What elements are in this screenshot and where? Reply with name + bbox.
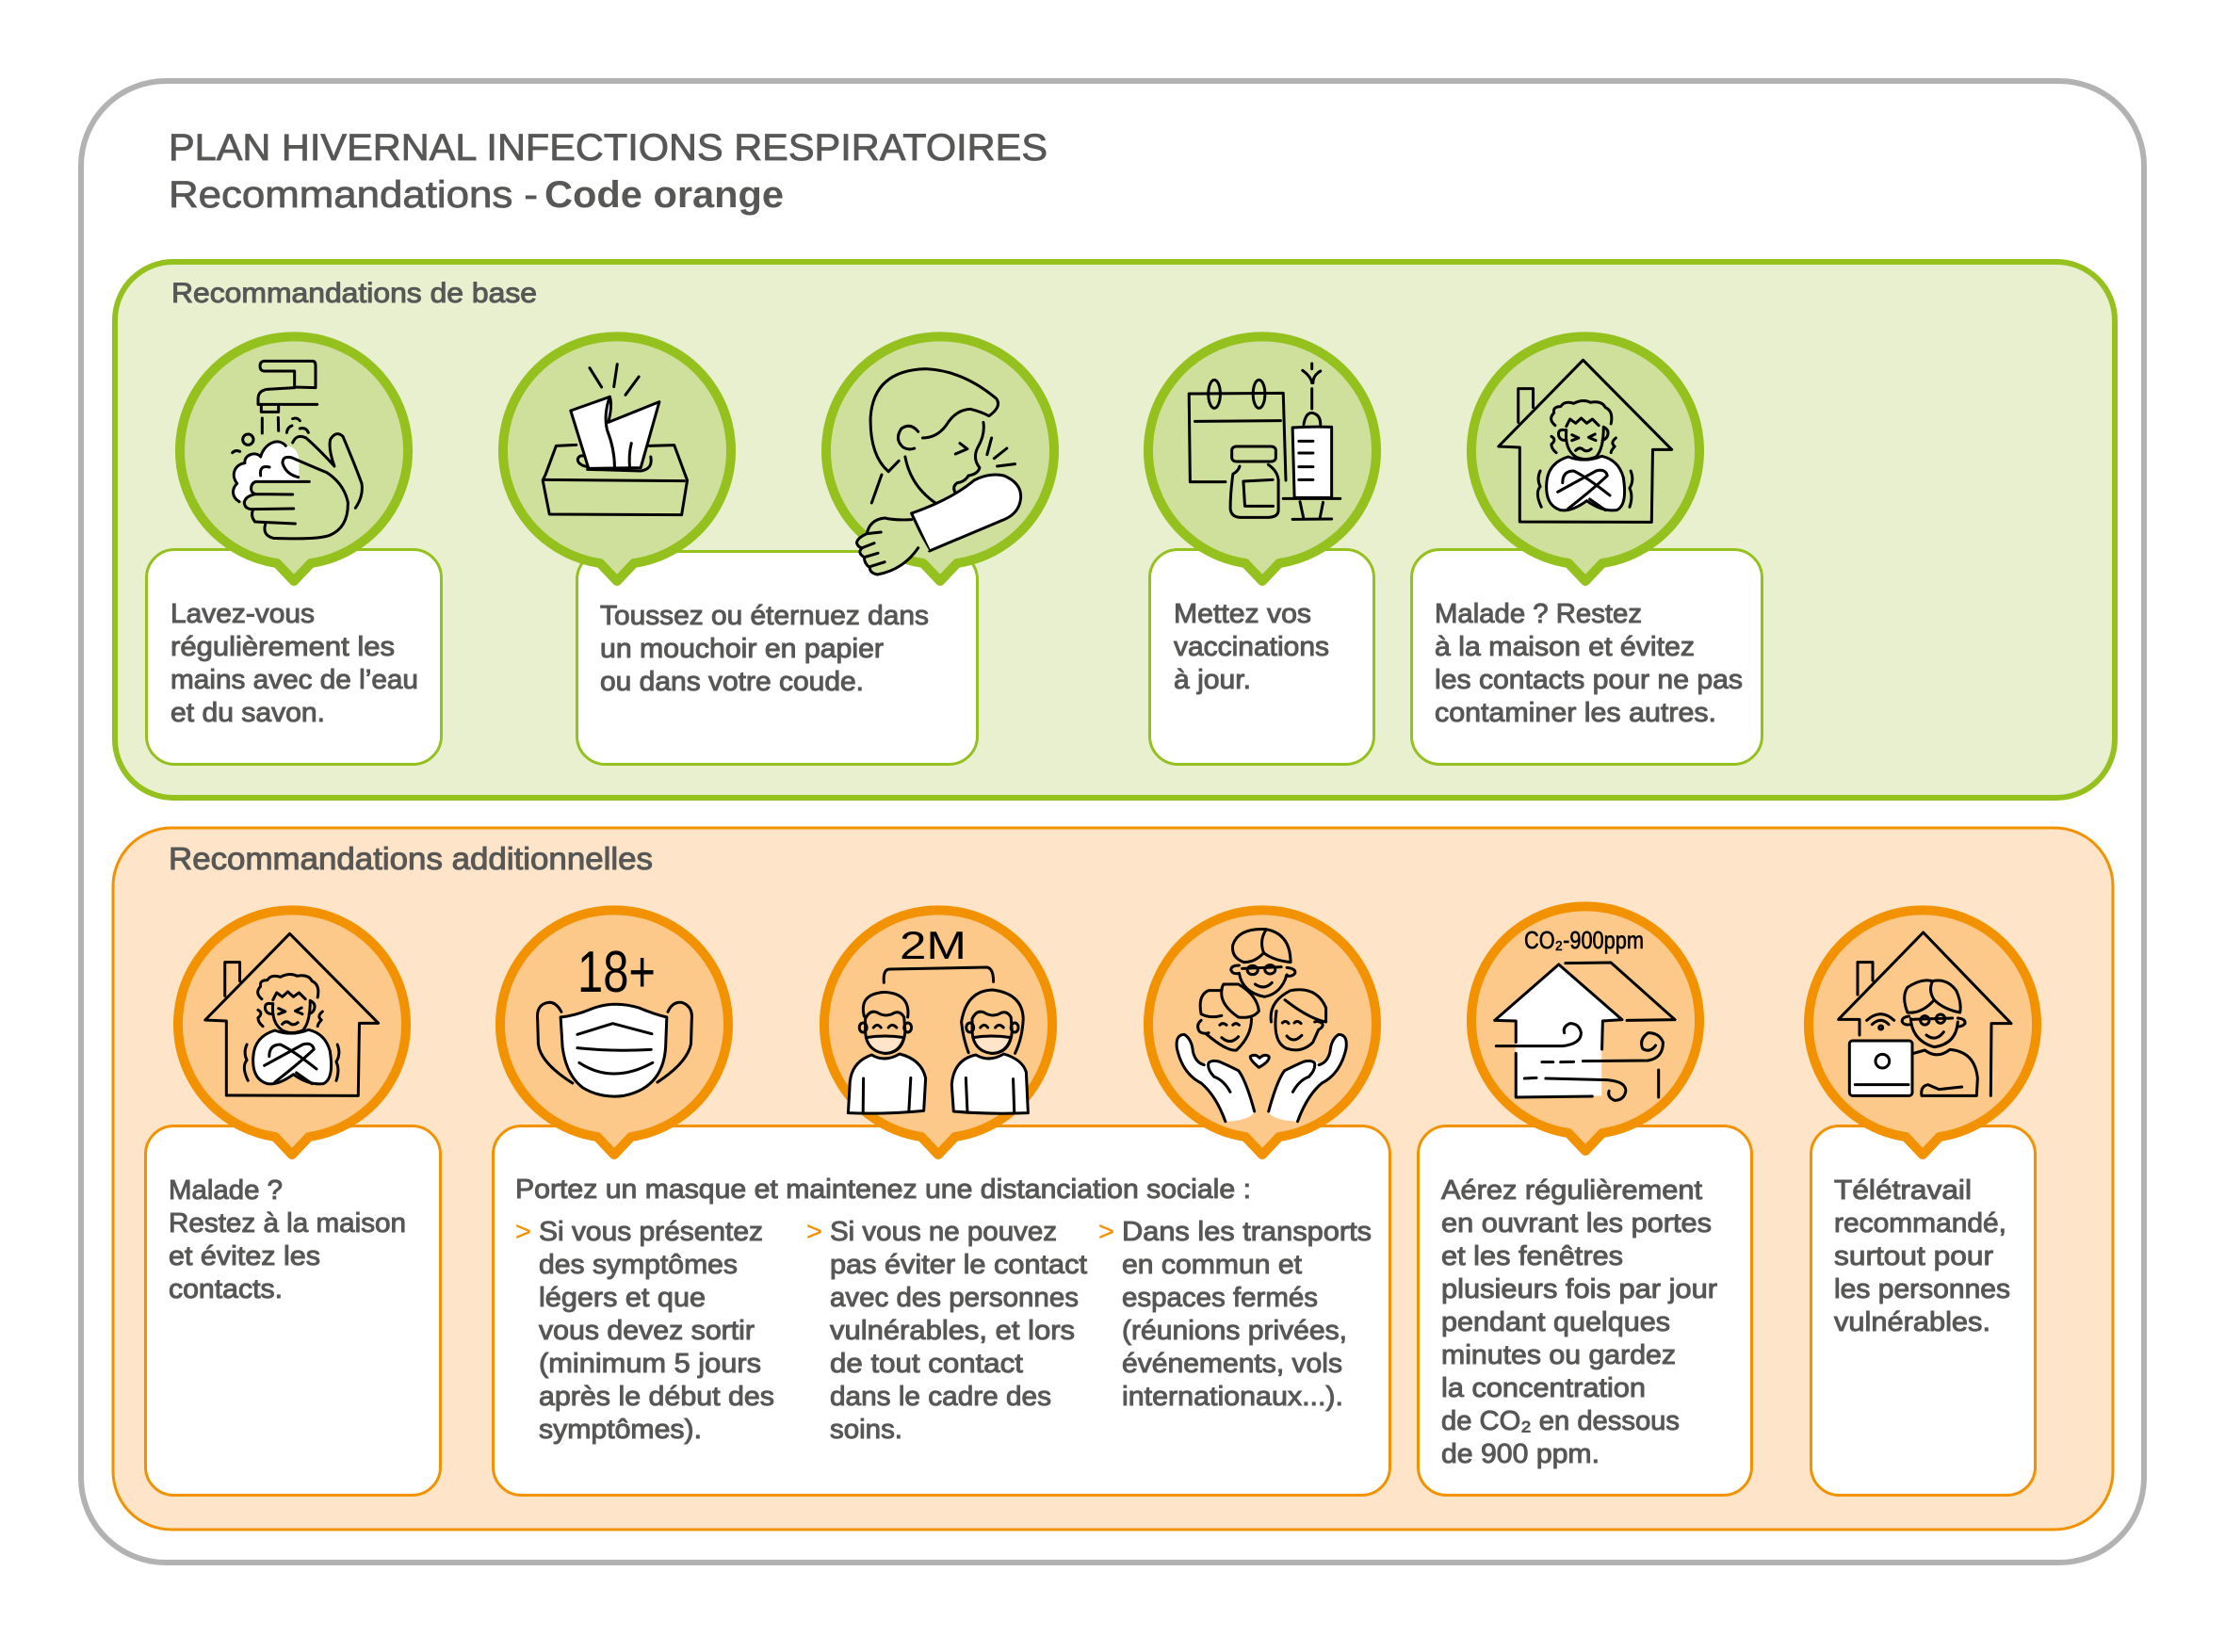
- title: [169, 127, 1048, 216]
- text: column symptômes: >: [515, 1217, 531, 1247]
- icon: family in caring hands: [1177, 930, 1346, 1122]
- text: column symptômes: Si vous présentez: [539, 1217, 763, 1247]
- text: column contacts vulnérables: avec des personnes: [830, 1283, 1079, 1313]
- text: column contacts vulnérables: pas éviter le contact: [830, 1250, 1087, 1280]
- balloon: vaccin: [1148, 336, 1376, 581]
- icon: coughing into elbow: [856, 369, 1021, 575]
- box: vaccinations: [1149, 550, 1373, 765]
- text: malade: Malade ? Restez: [1435, 599, 1642, 629]
- text: télétravail: vulnérables.: [1834, 1307, 1990, 1337]
- title: Recommandations -: [169, 174, 538, 216]
- text: column transports: en commun et: [1122, 1250, 1302, 1280]
- balloon: aération: [1471, 906, 1699, 1151]
- text: vaccinations: [1174, 599, 1329, 695]
- panel: recommandations de base: [115, 262, 2115, 798]
- balloon: lavage des mains: [180, 336, 408, 581]
- icon: sick person at home: [1499, 360, 1672, 522]
- text: column symptômes: vous devez sortir: [539, 1316, 755, 1346]
- text: column contacts vulnérables: soins.: [830, 1415, 902, 1445]
- text: malade: et évitez les: [169, 1241, 320, 1271]
- text: column contacts vulnérables: >: [806, 1217, 822, 1247]
- box: malade: [145, 1126, 441, 1496]
- balloon: mouchoir: [503, 336, 731, 581]
- text: aérez: et les fenêtres: [1441, 1241, 1623, 1271]
- box: toussez: [577, 552, 978, 765]
- icon label: CO2 900 ppm: CO₂-900ppm: [1524, 926, 1644, 954]
- text: aérez: pendant quelques: [1441, 1307, 1670, 1337]
- box: lavez-vous: [147, 550, 441, 765]
- text: malade: contacts.: [169, 1274, 283, 1304]
- text: télétravail: les personnes: [1834, 1274, 2010, 1304]
- icon: calendar, vial and syringe: [1189, 364, 1340, 519]
- heading: additionnelles: Recommandations additionnelles: [169, 841, 653, 876]
- text: malade: [169, 1175, 406, 1304]
- text: aérez: [1441, 1175, 1717, 1469]
- box: malade: [1411, 550, 1762, 765]
- text: column transports: [1098, 1217, 1372, 1412]
- text: toussez: un mouchoir en papier: [600, 634, 884, 664]
- box: masque et distanciation: [494, 1126, 1390, 1496]
- box: aérez: [1419, 1126, 1752, 1496]
- text: aérez: de 900 ppm.: [1441, 1439, 1600, 1469]
- balloon: coude: [826, 336, 1054, 581]
- icon: face mask 18+: [537, 1002, 691, 1096]
- text: lavez-vous: régulièrement les: [171, 632, 395, 662]
- text: malade: contaminer les autres.: [1435, 698, 1716, 728]
- text: aérez: la concentration: [1441, 1373, 1646, 1403]
- text: column transports: Dans les transports: [1122, 1217, 1372, 1247]
- icon: ventilated house: [1495, 963, 1675, 1100]
- text: column contacts vulnérables: [806, 1217, 1087, 1445]
- text: aérez: minutes ou gardez: [1441, 1340, 1676, 1370]
- text: column symptômes: symptômes).: [539, 1415, 702, 1445]
- title: PLAN HIVERNAL INFECTIONS RESPIRATOIRES: [169, 127, 1048, 169]
- text: column contacts vulnérables: dans le cadre des: [830, 1382, 1051, 1412]
- icon label: 2M: 2M: [900, 923, 966, 967]
- text: aérez: plusieurs fois par jour: [1441, 1274, 1717, 1304]
- text: aérez: Aérez régulièrement: [1441, 1175, 1702, 1206]
- text: aérez: de CO₂ en dessous: [1441, 1406, 1680, 1436]
- text: column contacts vulnérables: vulnérables, et lors: [830, 1316, 1075, 1346]
- text: lavez-vous: Lavez-vous: [171, 599, 315, 629]
- text: malade: Malade ?: [169, 1175, 283, 1206]
- text: lavez-vous: [171, 599, 418, 728]
- panel: recommandations additionnelles: [113, 828, 2113, 1530]
- text: toussez: ou dans votre coude.: [600, 667, 864, 697]
- text: télétravail: surtout pour: [1834, 1241, 1993, 1271]
- text: column symptômes: des symptômes: [539, 1250, 738, 1280]
- text: column transports: espaces fermés: [1122, 1283, 1318, 1313]
- text: column transports: >: [1098, 1217, 1114, 1247]
- balloon: famille: [1148, 910, 1376, 1155]
- text: vaccinations: à jour.: [1174, 665, 1251, 695]
- text: column contacts vulnérables: de tout contact: [830, 1349, 1023, 1379]
- text: télétravail: recommandé,: [1834, 1208, 2006, 1239]
- balloon: malade maison: [1471, 336, 1699, 581]
- icon: sick person at home: [205, 933, 379, 1095]
- text: malade: [1435, 599, 1743, 728]
- balloon: distance: [824, 910, 1052, 1155]
- balloon: masque: [500, 910, 728, 1155]
- text: lavez-vous: et du savon.: [171, 698, 325, 728]
- heading: base: Recommandations de base: [171, 278, 537, 309]
- box: télétravail: [1811, 1126, 2035, 1496]
- text: column transports: événements, vols: [1122, 1349, 1342, 1379]
- text: vaccinations: Mettez vos: [1174, 599, 1311, 629]
- text: lavez-vous: mains avec de l’eau: [171, 665, 418, 695]
- text: column symptômes: (minimum 5 jours: [539, 1349, 761, 1379]
- icon label: 18+: 18+: [577, 940, 656, 1005]
- text: column symptômes: légers et que: [539, 1283, 706, 1313]
- text: télétravail: Télétravail: [1834, 1175, 1972, 1206]
- text: masque intro: Portez un masque et maintenez une distanciation sociale :: [515, 1174, 1251, 1205]
- icon: tissue box: [543, 364, 688, 515]
- text: télétravail: [1834, 1175, 2010, 1337]
- text: column contacts vulnérables: Si vous ne pouvez: [830, 1217, 1057, 1247]
- balloon: malade maison: [178, 910, 406, 1155]
- text: toussez: Toussez ou éternuez dans: [600, 601, 929, 631]
- text: toussez: [600, 601, 929, 697]
- text: column transports: internationaux...).: [1122, 1382, 1343, 1412]
- text: malade: les contacts pour ne pas: [1435, 665, 1743, 695]
- text: column symptômes: après le début des: [539, 1382, 774, 1412]
- text: malade: à la maison et évitez: [1435, 632, 1695, 662]
- icon: teleworking at home: [1839, 932, 2011, 1095]
- title: Code orange: [544, 174, 784, 216]
- text: column transports: (réunions privées,: [1122, 1316, 1347, 1346]
- text: column symptômes: [515, 1217, 774, 1445]
- icon: two people two metres apart: [848, 967, 1028, 1113]
- icon: washing hands: [233, 361, 362, 539]
- text: malade: Restez à la maison: [169, 1208, 406, 1239]
- text: vaccinations: vaccinations: [1174, 632, 1329, 662]
- text: aérez: en ouvrant les portes: [1441, 1208, 1712, 1239]
- balloon: télétravail: [1809, 910, 2037, 1155]
